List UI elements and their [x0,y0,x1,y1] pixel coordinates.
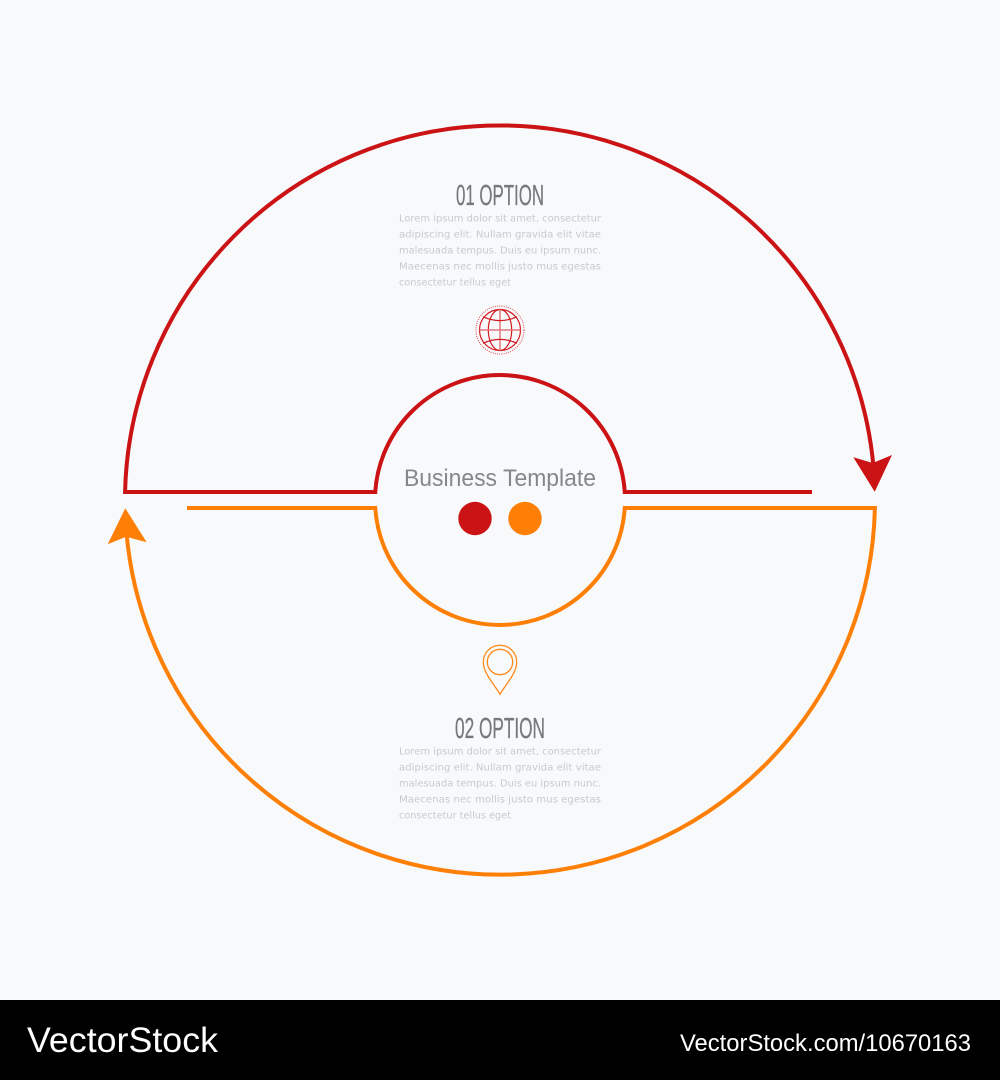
text block: option 01 body: Maecenas nec mollis justo mus egestas [399,262,601,272]
text block: option 01 body: Lorem ipsum dolor sit amet, consectetur [399,214,601,224]
orange dot [508,502,542,535]
icon: map pin [483,645,517,694]
footer url: VectorStock.com/10670163 [680,1030,971,1057]
text block: option 02 body [399,746,601,822]
text block: option 02 body: consectetur tellus eget [399,810,511,822]
footer brand: VectorStock [27,1021,219,1060]
orange loop arrow line [126,508,875,875]
heading: 01 option: 01 OPTION [456,180,544,212]
text block: option 02 body: adipiscing elit. Nullam gravida elit vitae [399,762,601,774]
red loop arrow line [125,125,874,492]
section: option 01 [399,180,601,288]
text block: option 02 body: malesuada tempus. Duis eu ipsum nunc. [399,778,601,790]
icon: globe [476,306,524,354]
red dot [458,502,492,535]
text block: option 01 body: consectetur tellus eget [399,278,511,288]
section: option 02 [399,713,601,822]
text block: option 01 body: adipiscing elit. Nullam gravida elit vitae [399,230,601,240]
text block: option 01 body: malesuada tempus. Duis eu ipsum nunc. [399,246,601,256]
text block: option 02 body: Maecenas nec mollis justo mus egestas [399,794,601,806]
text block: option 01 body [399,214,601,288]
center title: Business Template [404,465,596,492]
text block: option 02 body: Lorem ipsum dolor sit amet, consectetur [399,746,601,758]
footer bar [0,1000,1000,1080]
heading: 02 option: 02 OPTION [455,713,545,745]
orange arrowhead [108,508,147,544]
red arrowhead [853,455,892,492]
